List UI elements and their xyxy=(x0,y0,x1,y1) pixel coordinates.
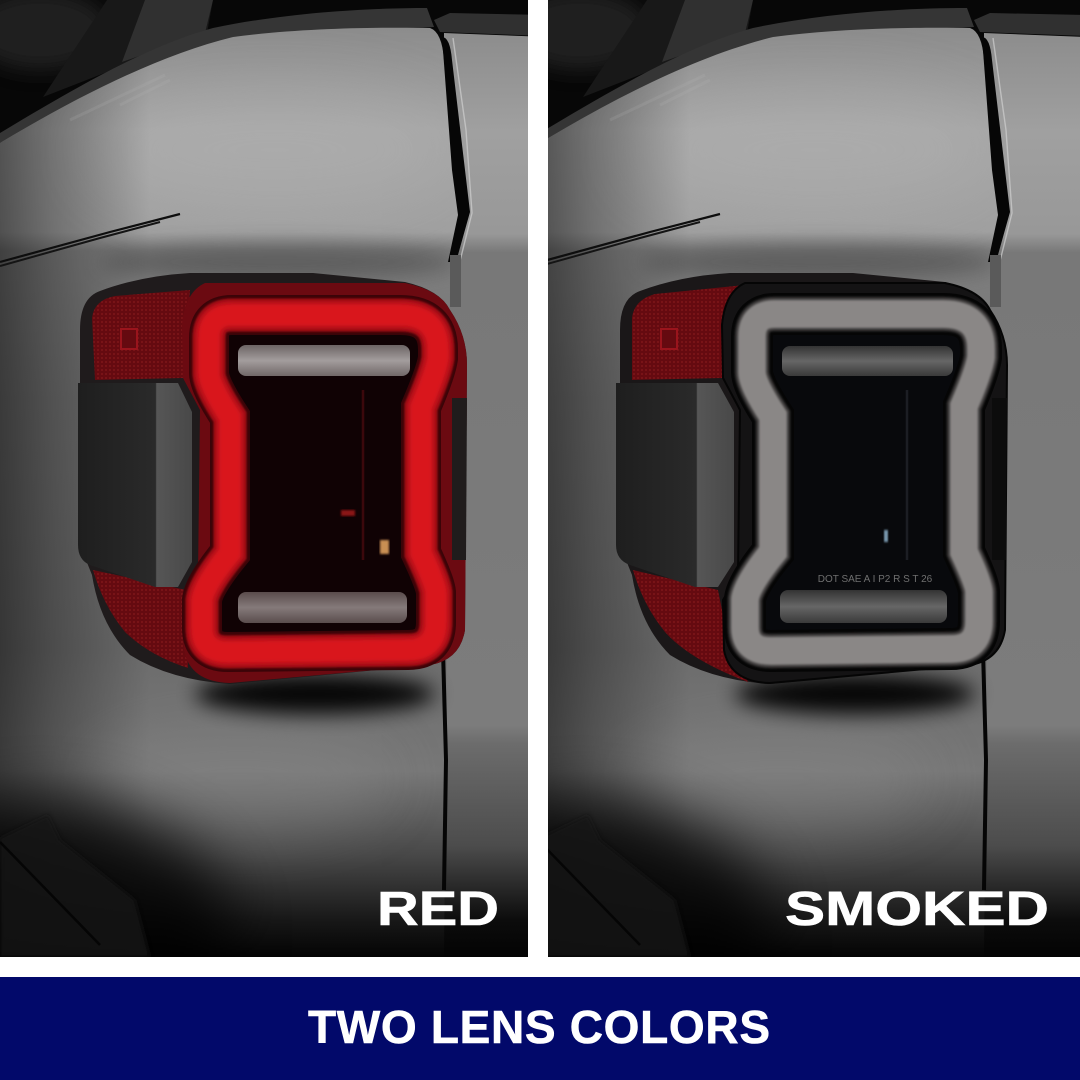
tail light: red lens xyxy=(78,273,467,684)
red reflector bottom xyxy=(633,570,748,682)
label: RED: RED xyxy=(377,883,499,936)
lens outer xyxy=(722,283,1007,683)
banner title: TWO LENS COLORS xyxy=(308,1001,770,1053)
red reflector top xyxy=(632,285,745,380)
smoked strip top xyxy=(782,346,953,376)
window interior detail xyxy=(362,390,364,560)
clear strip bottom xyxy=(238,592,407,623)
lens outer xyxy=(182,283,467,683)
label: SMOKED: SMOKED xyxy=(785,883,1049,936)
tail light: smoked lens xyxy=(616,273,1007,684)
window xyxy=(745,314,981,651)
window interior detail xyxy=(906,390,908,560)
red reflector bottom xyxy=(93,570,188,668)
window xyxy=(202,315,438,652)
vehicle body xyxy=(548,0,1080,957)
light ring xyxy=(202,315,438,652)
banner xyxy=(0,977,1080,1080)
red reflector top xyxy=(92,290,190,380)
gray housing block xyxy=(78,383,192,587)
clear strip top xyxy=(238,345,410,376)
smoked strip bottom xyxy=(780,590,947,623)
vehicle body xyxy=(0,0,528,957)
DOT marking: DOT SAE A I P2 R S T 26 xyxy=(818,574,933,585)
panel: smoked lens photo xyxy=(548,0,1080,957)
light ring xyxy=(745,314,981,651)
gray housing block xyxy=(616,383,734,587)
panel: red lens photo xyxy=(0,0,528,957)
